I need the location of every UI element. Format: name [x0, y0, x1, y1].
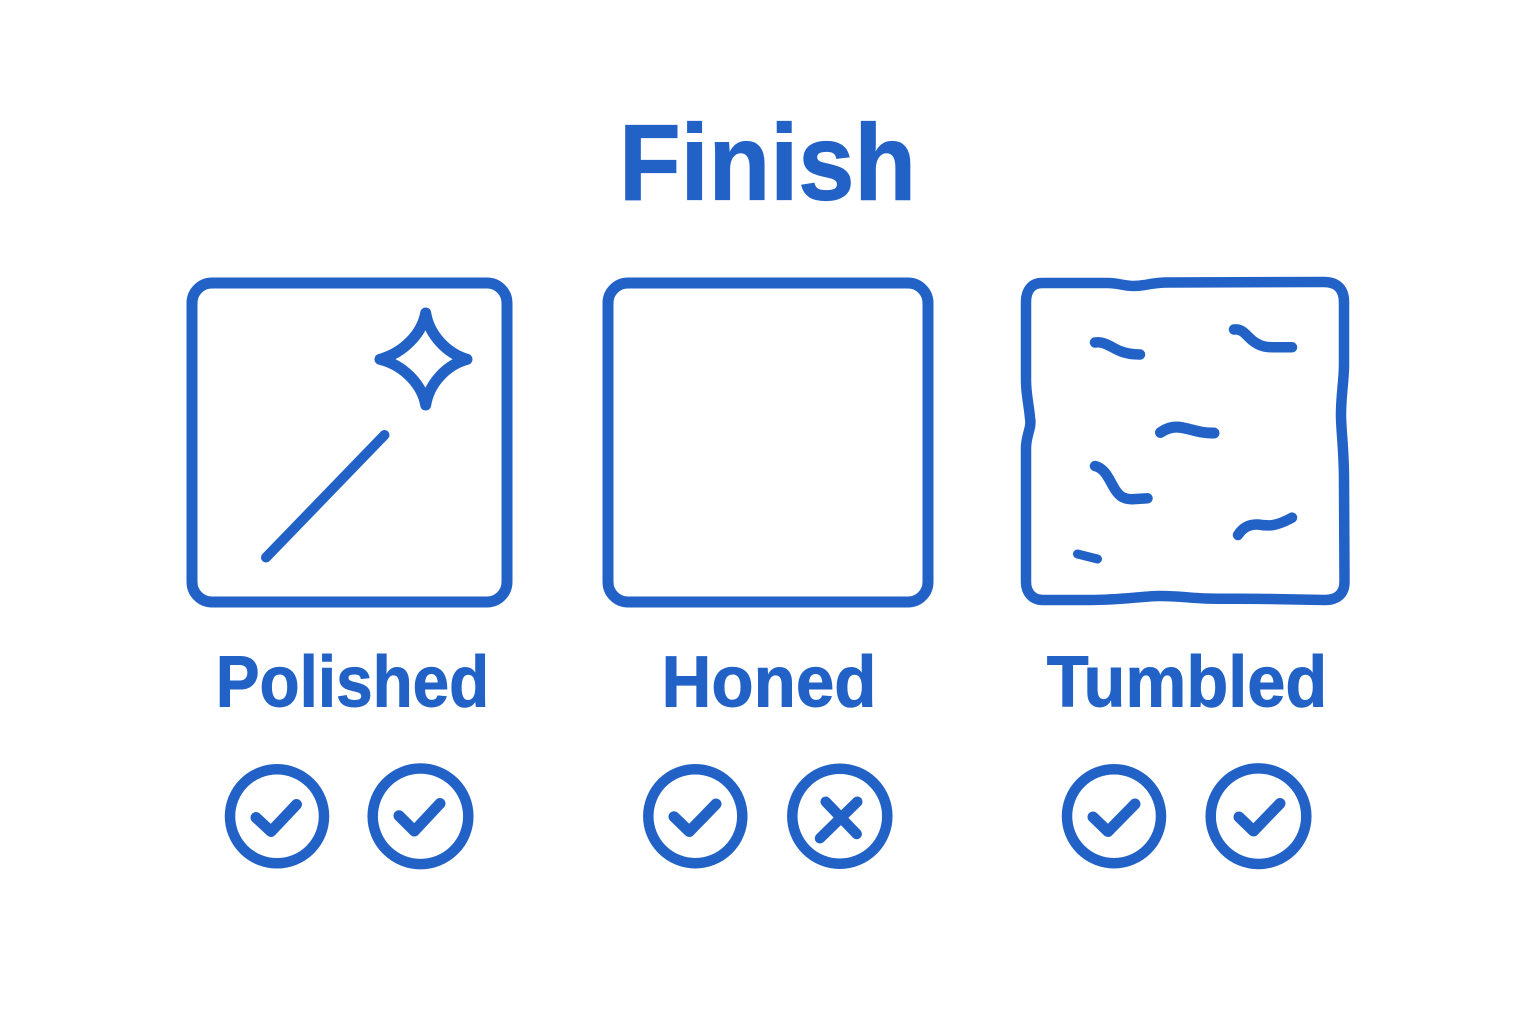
surface mark 5 [1238, 518, 1292, 535]
title: Finish [619, 102, 916, 222]
icon: tumbled check 1 [1067, 769, 1161, 863]
panel: honed [608, 283, 928, 602]
label: polished: Polished [216, 642, 489, 722]
polished tile outline [192, 283, 507, 602]
icon: sparkle [380, 313, 467, 405]
icon: polished check 1 [230, 769, 324, 863]
tumbled tile outline [1026, 282, 1344, 600]
icon: tumbled check 2 [1211, 768, 1306, 864]
icon: honed check [648, 769, 742, 863]
surface mark 1 [1095, 342, 1140, 354]
surface mark 6 [1078, 554, 1098, 559]
panel: tumbled [1026, 282, 1344, 600]
surface mark 2 [1234, 329, 1292, 347]
label: tumbled: Tumbled [1047, 642, 1327, 722]
icon: wand stroke [266, 435, 384, 558]
surface mark 4 [1095, 466, 1148, 499]
icon: honed cross [792, 769, 887, 864]
label: honed: Honed [662, 642, 876, 722]
icon: polished check 2 [373, 768, 468, 864]
surface mark 3 [1160, 427, 1214, 433]
panel: polished [192, 283, 507, 602]
